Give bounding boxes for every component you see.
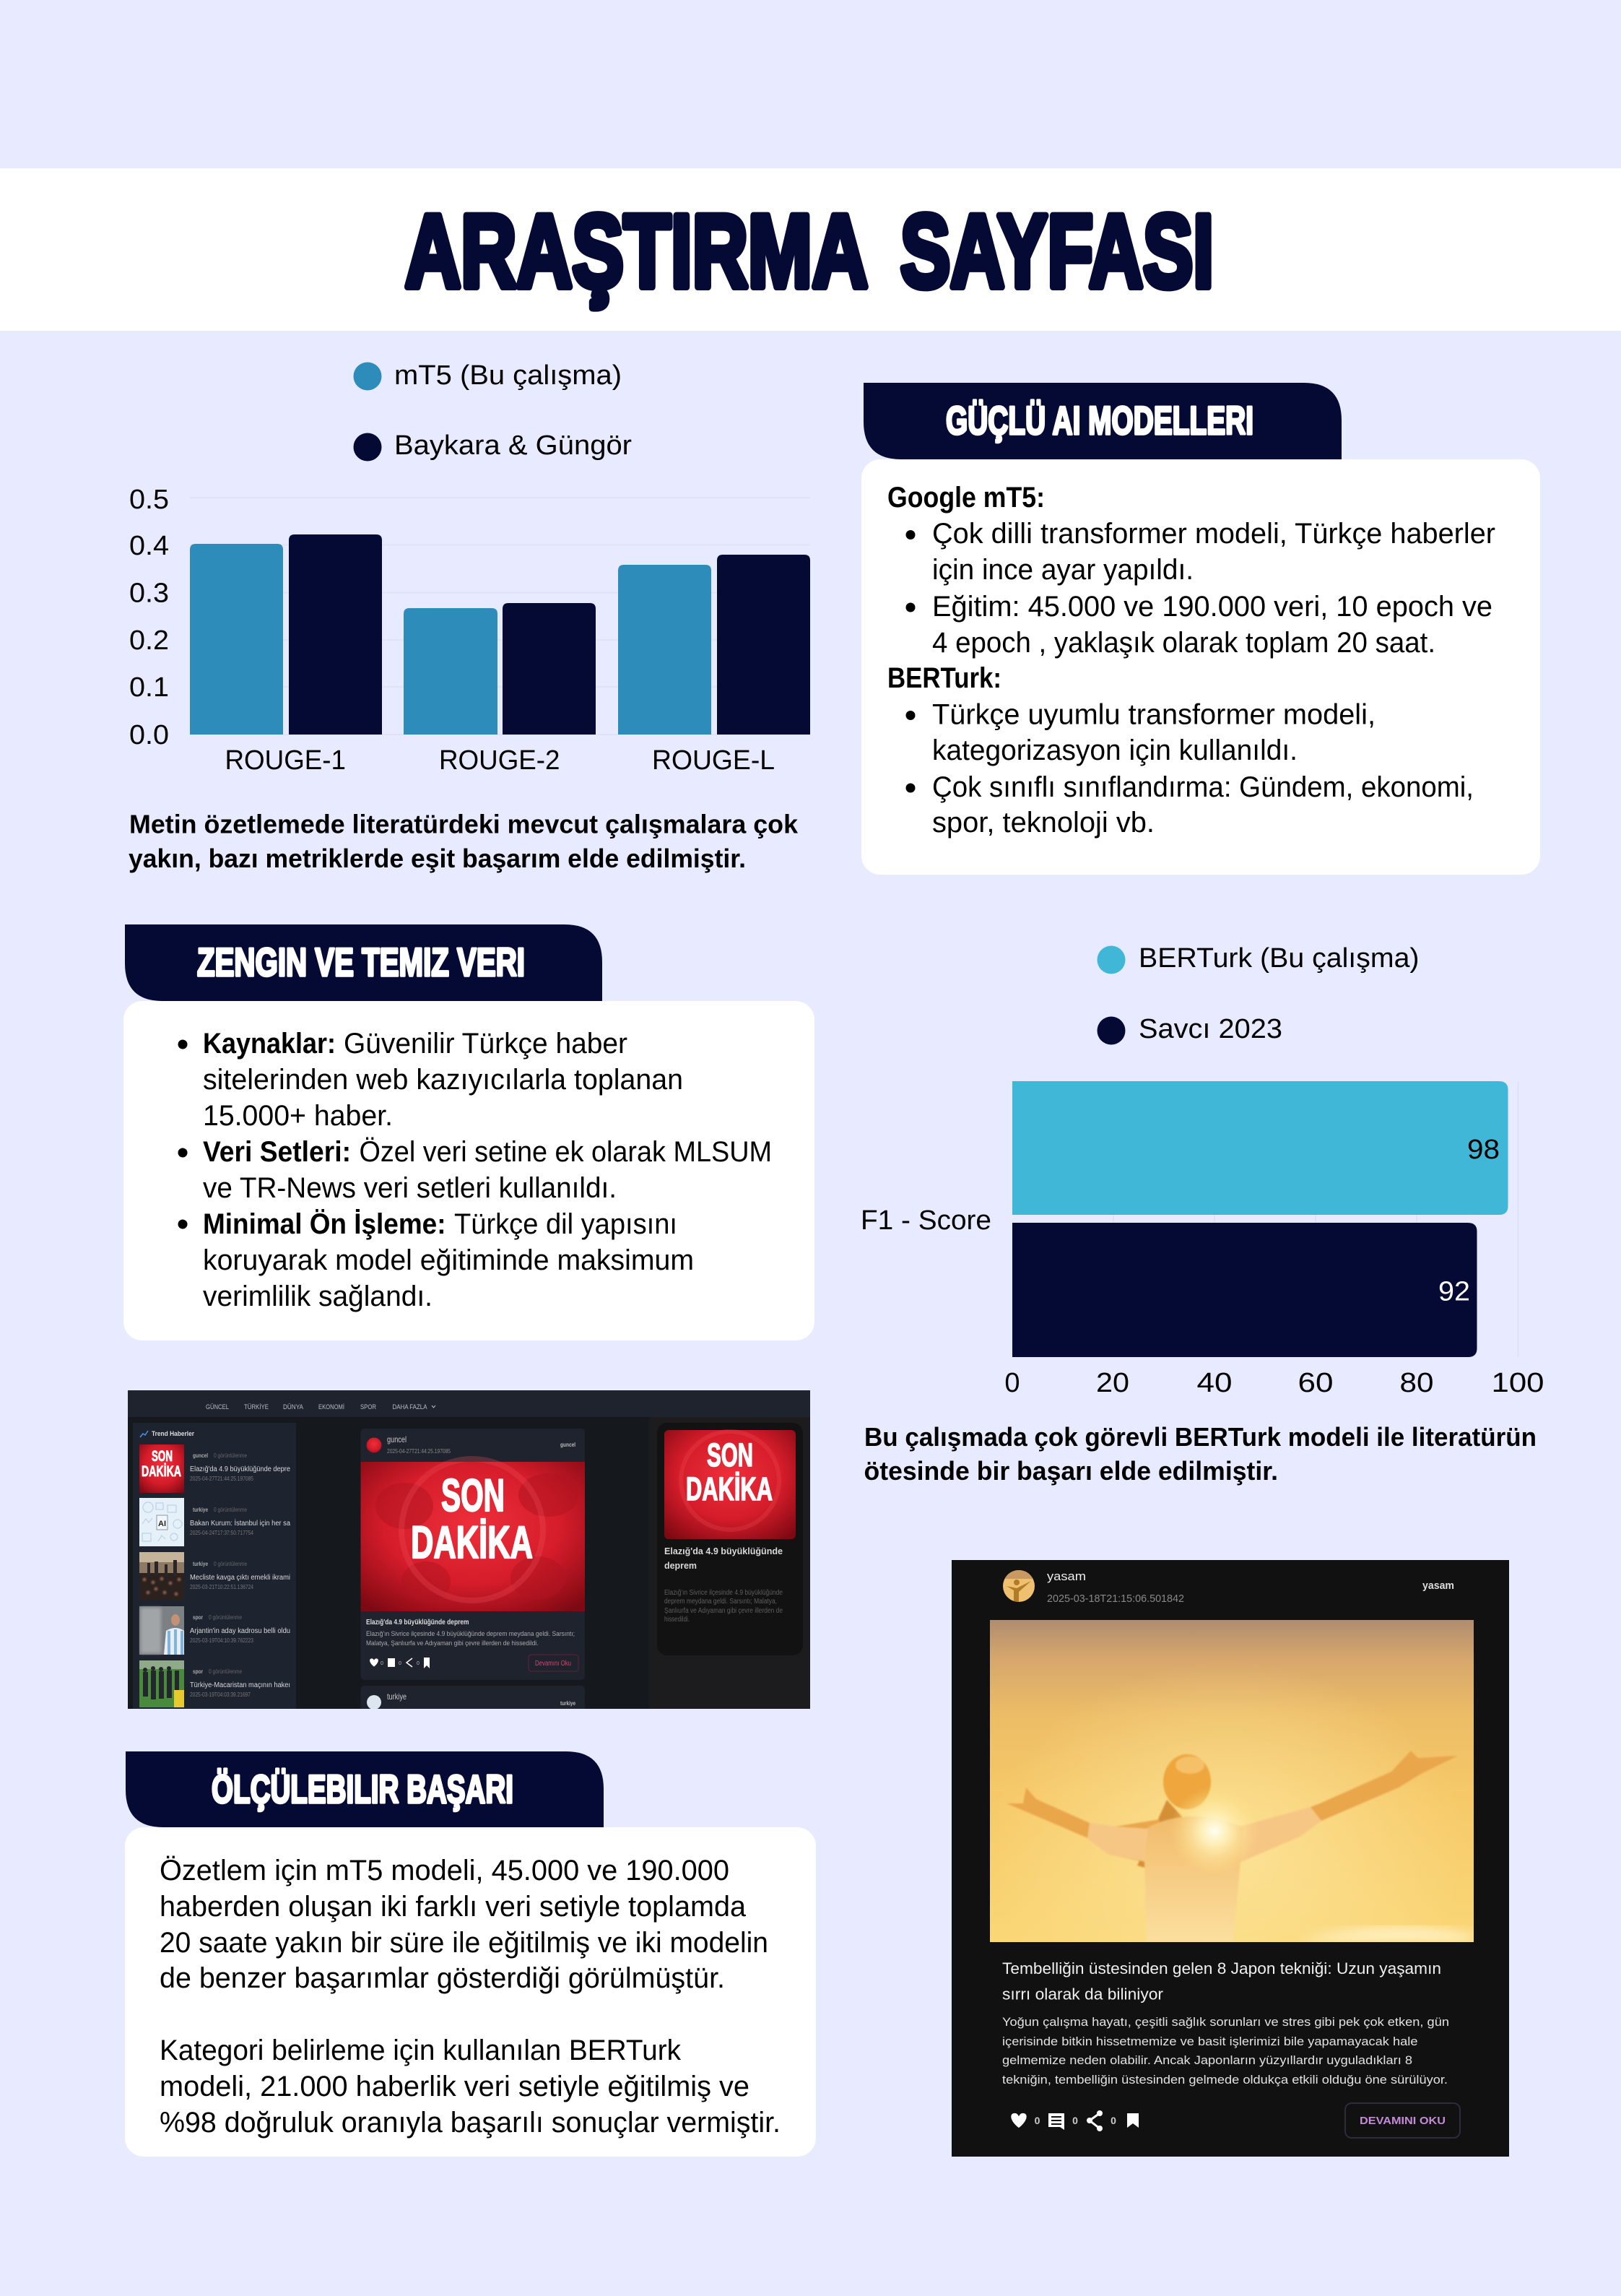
image: son dakika: DAKİKA bbox=[411, 1517, 533, 1568]
text block: Çok dilli transformer modeli, Türkçe haberler bbox=[932, 518, 1495, 550]
caption: BERTurk result: Bu çalışmada çok görevli BERTurk modeli ile literatürün bbox=[864, 1422, 1537, 1452]
thumbnail: son dakika bbox=[139, 1444, 184, 1493]
bar: 98: 98 bbox=[1467, 1135, 1500, 1165]
bar: 92: 92 bbox=[1438, 1277, 1470, 1307]
legend: Baykara & Güngör: Baykara & Güngör bbox=[394, 430, 632, 461]
text block: Özetlem için mT5 modeli, 45.000 ve 190.000 bbox=[160, 1855, 729, 1886]
horizontal bar chart: F1 score bbox=[861, 943, 1544, 1398]
legend: mT5: mT5 (Bu çalışma) bbox=[394, 360, 622, 391]
trend item texts: 2025-04-27T21:44:25.197085 bbox=[190, 1476, 253, 1482]
thumbnail: son dakika: SON bbox=[152, 1448, 173, 1465]
head bbox=[1163, 1754, 1211, 1809]
bar chart: ROUGE scores bbox=[129, 360, 810, 776]
text block: Veri Setleri: bbox=[203, 1136, 351, 1168]
text block: Güvenilir Türkçe haber bbox=[344, 1028, 627, 1060]
button: devamını oku bbox=[1345, 2103, 1460, 2138]
y axis labels bbox=[129, 485, 169, 750]
second news card bbox=[361, 1686, 585, 1709]
text block: Google mT5: bbox=[887, 482, 1045, 514]
trend item texts: Bakan Kurum: İstanbul için her sa bbox=[190, 1518, 290, 1528]
trend item texts: 2025-03-21T10:22:51.136724 bbox=[190, 1584, 253, 1590]
text block: Özel veri setine ek olarak MLSUM bbox=[360, 1136, 772, 1168]
thumbnail: AI bbox=[139, 1498, 184, 1546]
title band bbox=[0, 168, 1621, 331]
trend item texts bbox=[190, 1452, 290, 1698]
image: son dakika: DAKİKA bbox=[686, 1470, 773, 1507]
text block: Türkçe uyumlu transformer modeli, bbox=[932, 699, 1376, 731]
caption: BERTurk result: ötesinde bir başarı elde edilmiştir. bbox=[864, 1456, 1278, 1486]
image: son dakika: SON bbox=[707, 1437, 753, 1473]
text block bbox=[887, 482, 1495, 839]
center news card: guncel bbox=[560, 1442, 575, 1448]
center news card: 2025-04-27T21:44:25.197085 bbox=[387, 1448, 451, 1455]
icons: 0 bbox=[381, 1661, 383, 1666]
right sidebar: Şanlıurfa ve Adıyaman gibi çevre illerden de bbox=[664, 1607, 783, 1615]
trend item texts: Elazığ'da 4.9 büyüklüğünde depre bbox=[190, 1465, 290, 1473]
y axis labels: 0.0 bbox=[129, 720, 169, 750]
article text: gelmemize neden olabilir. Ancak Japonların yüzyıllardır uyguladıkları 8 bbox=[1002, 2053, 1412, 2067]
text block: modeli, 21.000 haberlik veri setiyle eğitilmiş ve bbox=[160, 2071, 749, 2102]
headline: Tembelliğin üstesinden gelen 8 Japon tekniği: Uzun yaşamın bbox=[1002, 1959, 1441, 1977]
icons bbox=[370, 1658, 430, 1668]
x axis labels: 40 bbox=[1197, 1368, 1232, 1398]
trend item texts: spor bbox=[193, 1668, 203, 1675]
title: SAYFASI bbox=[900, 194, 1214, 309]
trend item texts: spor bbox=[193, 1614, 203, 1621]
thumbnail: football player bbox=[139, 1606, 184, 1655]
x axis labels: ROUGE-L bbox=[652, 745, 775, 776]
screenshot: news site home page bbox=[128, 1390, 810, 1715]
second news card: turkiye bbox=[560, 1700, 575, 1707]
trend item texts: 0 görüntülenme bbox=[214, 1452, 247, 1459]
nav bar: SPOR bbox=[360, 1403, 376, 1411]
bar: 98 bbox=[1012, 1081, 1508, 1215]
thumbnail: son dakika: DAKİKA bbox=[142, 1463, 181, 1480]
center news card bbox=[361, 1429, 585, 1680]
thumbnail: team bbox=[139, 1660, 184, 1707]
heading tab bbox=[864, 383, 1342, 459]
category label: F1 - Score bbox=[861, 1205, 991, 1236]
caption: summarization result bbox=[129, 809, 799, 873]
panel: ölçülebilir başarı bbox=[125, 1751, 816, 2157]
text block: verimlilik sağlandı. bbox=[203, 1281, 433, 1312]
text block: için ince ayar yapıldı. bbox=[932, 554, 1194, 586]
image: son dakika: SON bbox=[441, 1470, 505, 1521]
nav bar bbox=[128, 1390, 810, 1417]
trend item texts: 2025-03-19T04:10:39.762223 bbox=[190, 1637, 253, 1644]
center news card: guncel bbox=[387, 1434, 407, 1444]
left arm bbox=[1007, 1788, 1160, 1862]
nav bar: DÜNYA bbox=[283, 1403, 303, 1411]
x axis labels: 20 bbox=[1096, 1368, 1129, 1398]
text block bbox=[160, 1855, 781, 2139]
button: devamını oku: Devamını Oku bbox=[535, 1660, 571, 1668]
sidebar: trending news: Trend Haberler bbox=[152, 1430, 194, 1437]
trend item texts: Türkiye-Macaristan maçının hakeı bbox=[190, 1681, 290, 1689]
screenshot: news article card: yasam bbox=[1047, 1569, 1086, 1583]
text block: Kategori belirleme için kullanılan BERTurk bbox=[160, 2035, 682, 2066]
bar: 92 bbox=[1012, 1223, 1477, 1357]
caption: summarization result: yakın, bazı metriklerde eşit başarım elde edilmiştir. bbox=[129, 844, 746, 873]
nav bar: GÜNCEL bbox=[206, 1403, 229, 1411]
text block: kategorizasyon için kullanıldı. bbox=[932, 735, 1298, 766]
text block: BERTurk: bbox=[887, 662, 1001, 694]
image: son dakika bbox=[361, 1459, 585, 1611]
trend item texts: Arjantin'in aday kadrosu belli oldu bbox=[190, 1627, 290, 1635]
x axis labels: 100 bbox=[1492, 1368, 1544, 1398]
x axis labels: 60 bbox=[1298, 1368, 1333, 1398]
center news card: Elazığ'da 4.9 büyüklüğünde deprem bbox=[366, 1619, 469, 1626]
panel: zengin ve temiz veri bbox=[123, 924, 814, 1340]
text block: haberden oluşan iki farklı veri setiyle toplamda bbox=[160, 1891, 747, 1923]
icons: 0 bbox=[399, 1661, 401, 1666]
text block: sitelerinden web kazıyıcılarla toplanan bbox=[203, 1064, 683, 1096]
action icons: 0 bbox=[1111, 2115, 1116, 2126]
icons: 0 bbox=[417, 1661, 420, 1666]
trend item texts: 0 görüntülenme bbox=[209, 1668, 242, 1675]
text block: Minimal Ön İşleme: bbox=[203, 1208, 446, 1240]
center news card: Elazığ'ın Sivrice ilçesinde 4.9 büyüklüğünde deprem meydana geldi. Sarsıntı; bbox=[366, 1630, 575, 1638]
action icons: 0 bbox=[1072, 2115, 1078, 2126]
heading tab: ZENGIN VE TEMIZ VERI bbox=[197, 940, 525, 984]
right sidebar: Elazığ'ın Sivrice ilçesinde 4.9 büyüklüğünde bbox=[664, 1589, 783, 1597]
y axis labels: 0.2 bbox=[129, 625, 169, 656]
right sidebar: Elazığ'da 4.9 büyüklüğünde bbox=[664, 1546, 783, 1556]
screenshot: news article card: 2025-03-18T21:15:06.501842 bbox=[1047, 1593, 1184, 1605]
second news card: turkiye bbox=[387, 1691, 407, 1702]
right sidebar bbox=[657, 1423, 803, 1655]
screenshot: news article card: yasam bbox=[1422, 1580, 1454, 1592]
legend: BERTurk: BERTurk (Bu çalışma) bbox=[1139, 943, 1420, 974]
x axis labels bbox=[225, 745, 775, 776]
article text: tekniğin, tembelliğin üstesinden gelmede oldukça etkili olduğu öne sürülüyor. bbox=[1002, 2073, 1448, 2087]
x axis labels: ROUGE-2 bbox=[439, 745, 560, 776]
title: ARAŞTIRMA bbox=[405, 194, 868, 309]
headline: sırrı olarak da biliniyor bbox=[1002, 1985, 1163, 2003]
article text: içerisinde bitkin hissetmemize ve basit işlerimizi bile yapamayacak hale bbox=[1002, 2035, 1418, 2048]
trend item texts: 0 görüntülenme bbox=[214, 1561, 247, 1567]
caption: BERTurk result bbox=[864, 1422, 1537, 1486]
center news card: Malatya, Şanlıurfa ve Adıyaman gibi çevre illerden de hissedildi. bbox=[366, 1639, 539, 1647]
trend item texts: 0 görüntülenme bbox=[214, 1507, 247, 1513]
text block bbox=[178, 1028, 772, 1312]
heading tab bbox=[126, 1751, 604, 1827]
heading tab: ÖLÇÜLEBILIR BAŞARI bbox=[212, 1767, 513, 1811]
hair bbox=[1137, 1800, 1191, 1871]
x axis labels: 80 bbox=[1399, 1368, 1434, 1398]
y axis labels: 0.3 bbox=[129, 578, 169, 608]
action icons: 0 bbox=[1035, 2115, 1040, 2126]
button: devamını oku: DEVAMINI OKU bbox=[1360, 2115, 1446, 2127]
text block: Eğitim: 45.000 ve 190.000 veri, 10 epoch ve bbox=[932, 591, 1492, 623]
text block: Çok sınıflı sınıflandırma: Gündem, ekonomi, bbox=[932, 771, 1474, 803]
y axis labels: 0.5 bbox=[129, 485, 169, 515]
trend item texts: 2025-04-24T17:37:50.717754 bbox=[190, 1530, 253, 1536]
avatar bbox=[1003, 1570, 1035, 1602]
x axis labels bbox=[1004, 1368, 1544, 1398]
article text: Yoğun çalışma hayatı, çeşitli sağlık sorunları ve stres gibi pek çok etken, gün bbox=[1002, 2015, 1449, 2029]
thumbnail: parliament bbox=[139, 1552, 184, 1600]
button: devamını oku bbox=[529, 1655, 578, 1671]
text block: 15.000+ haber. bbox=[203, 1100, 393, 1132]
trend item texts: guncel bbox=[193, 1452, 208, 1459]
image: son dakika bbox=[664, 1430, 796, 1539]
nav bar: DAHA FAZLA bbox=[393, 1403, 427, 1411]
right sidebar: deprem meydana geldi. Sarsıntı; Malatya, bbox=[664, 1598, 777, 1606]
sidebar: trending news bbox=[133, 1423, 296, 1709]
text block: Türkçe dil yapısını bbox=[454, 1208, 677, 1240]
article text bbox=[1002, 2015, 1449, 2087]
nav bar: TÜRKİYE bbox=[244, 1403, 269, 1411]
heading tab bbox=[125, 924, 602, 1001]
y axis labels: 0.4 bbox=[129, 531, 169, 561]
text block: ve TR-News veri setleri kullanıldı. bbox=[203, 1172, 617, 1204]
text block: 4 epoch , yaklaşık olarak toplam 20 saat. bbox=[932, 627, 1435, 659]
trend item texts: turkiye bbox=[193, 1507, 208, 1513]
caption: summarization result: Metin özetlemede literatürdeki mevcut çalışmalara çok bbox=[129, 809, 799, 839]
right sidebar: hissedildi. bbox=[664, 1616, 690, 1624]
torso bbox=[1144, 1816, 1243, 1942]
y axis labels: 0.1 bbox=[129, 672, 169, 703]
action icons bbox=[1011, 2110, 1139, 2131]
trend item texts: 0 görüntülenme bbox=[209, 1614, 242, 1621]
heading tab: GÜÇLÜ AI MODELLERI bbox=[946, 398, 1253, 443]
nav bar: EKONOMİ bbox=[318, 1403, 344, 1411]
text block: koruyarak model eğitiminde maksimum bbox=[203, 1244, 694, 1276]
trend item texts: turkiye bbox=[193, 1561, 208, 1567]
trend item texts: 2025-03-19T04:03:39.21697 bbox=[190, 1691, 251, 1698]
headline bbox=[1002, 1959, 1441, 2003]
x axis labels: ROUGE-1 bbox=[225, 745, 346, 776]
thumbnail: AI: AI bbox=[158, 1520, 166, 1528]
text block: de benzer başarımlar gösterdiği görülmüştür. bbox=[160, 1962, 725, 1994]
bars bbox=[190, 534, 810, 735]
legend: Savcı 2023: Savcı 2023 bbox=[1139, 1014, 1282, 1044]
panel: güçlü AI modelleri bbox=[861, 383, 1540, 875]
text block: Kaynaklar: bbox=[203, 1028, 336, 1060]
screenshot: news article card bbox=[952, 1560, 1509, 2157]
x axis labels: 0 bbox=[1004, 1368, 1020, 1398]
right sidebar: deprem bbox=[664, 1561, 697, 1571]
text block: %98 doğruluk oranıyla başarılı sonuçlar vermiştir. bbox=[160, 2107, 781, 2139]
right arm bbox=[1240, 1751, 1458, 1862]
text block: 20 saate yakın bir süre ile eğitilmiş ve iki modelin bbox=[160, 1927, 768, 1959]
text block: spor, teknoloji vb. bbox=[932, 807, 1155, 839]
trend item texts: Mecliste kavga çıktı emekli ikrami bbox=[190, 1574, 290, 1582]
photo: woman with open arms at sunset bbox=[989, 1620, 1474, 2037]
